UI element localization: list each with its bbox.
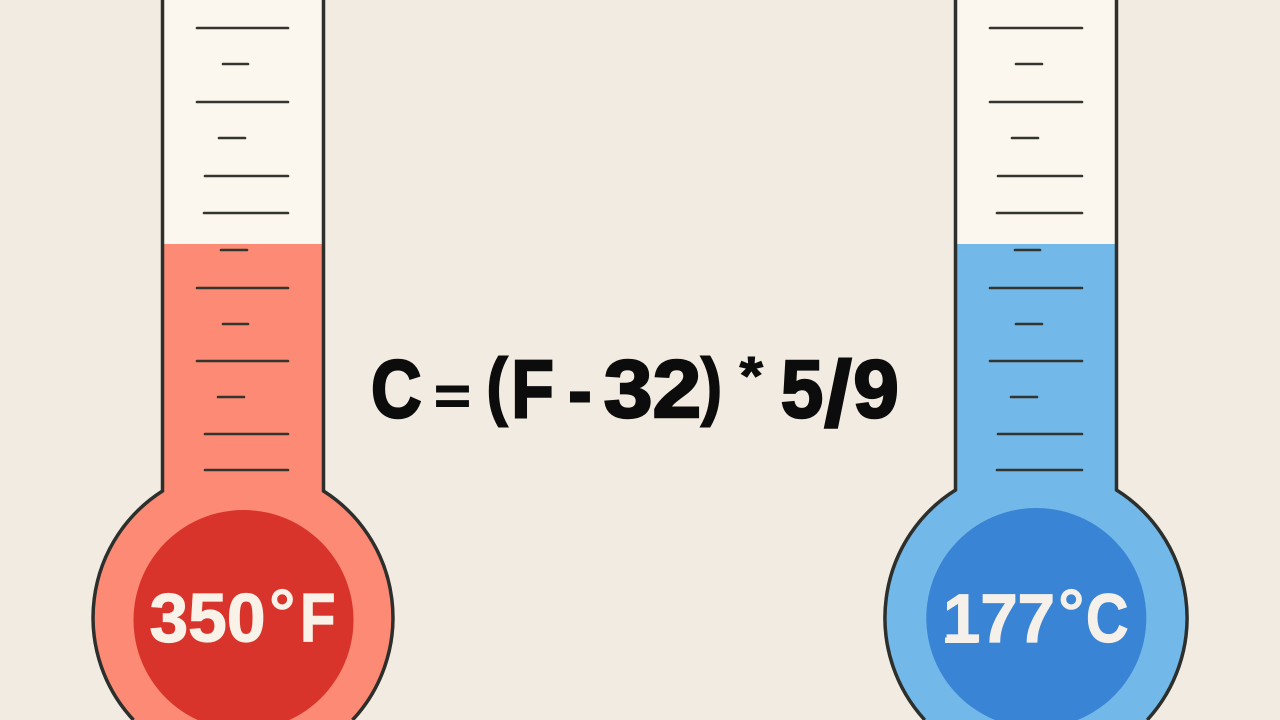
- conversion formula: /: [824, 342, 852, 446]
- blue bulb: [926, 508, 1146, 720]
- label: 177°C: 177: [943, 580, 1055, 657]
- tube empty section: [956, 0, 1116, 245]
- conversion formula: (: [486, 343, 508, 427]
- thermometer: Celsius: [885, 0, 1187, 720]
- conversion formula: 32: [604, 344, 701, 435]
- thermometer outline: [93, 0, 393, 720]
- blue mercury: [885, 244, 1187, 720]
- conversion formula: -: [568, 343, 592, 437]
- label: 350°F: F: [300, 580, 336, 656]
- tick marks: [990, 28, 1082, 470]
- conversion formula: C: [371, 344, 422, 435]
- conversion formula: F: [511, 344, 554, 435]
- conversion formula: ): [701, 343, 722, 427]
- label: 350°F: °: [269, 575, 295, 649]
- conversion formula: [371, 342, 899, 446]
- conversion formula: =: [434, 366, 471, 427]
- red mercury: [93, 244, 393, 720]
- conversion formula: *: [740, 346, 763, 406]
- label: 350°F: 350: [150, 580, 266, 656]
- conversion formula: 5: [781, 344, 823, 435]
- red bulb: [133, 510, 354, 720]
- tick marks: [197, 28, 288, 470]
- thermometer: Fahrenheit: [93, 0, 393, 720]
- foot of numeral 1: [945, 638, 977, 643]
- label: 177°C: C: [1086, 580, 1128, 657]
- tube empty section: [163, 0, 323, 245]
- label: 177°C: °: [1058, 575, 1084, 649]
- conversion formula: 9: [853, 344, 899, 435]
- thermometer outline: [885, 0, 1187, 720]
